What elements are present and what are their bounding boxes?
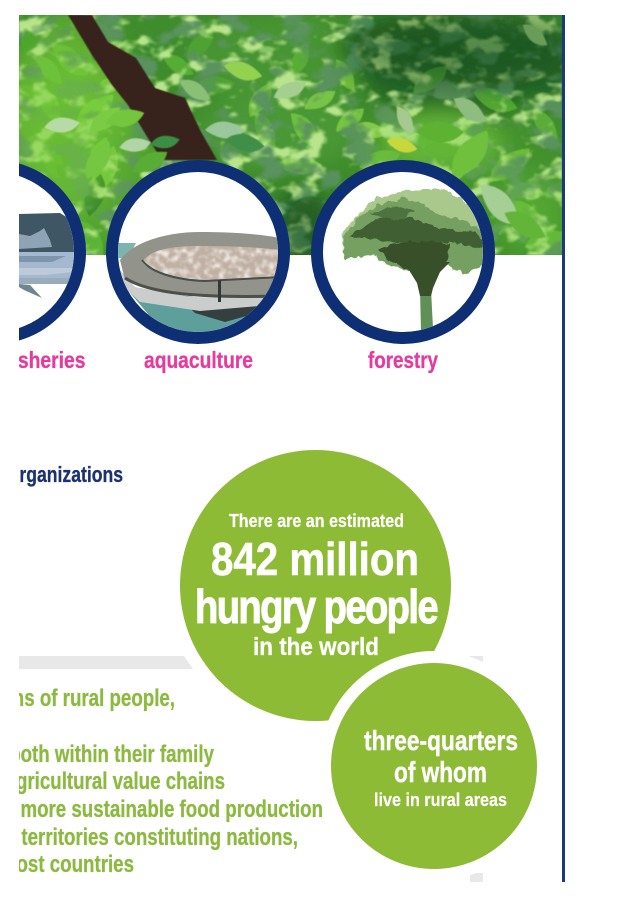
text block: rural people list: both within their family [9, 741, 214, 768]
text block: rural people list: agricultural value chains [6, 768, 225, 795]
label: aquaculture: aquaculture [144, 347, 253, 373]
tree trunk [420, 294, 433, 330]
small print: in the world: in the world [253, 633, 379, 661]
small print: estimated: There are an estimated [229, 511, 404, 531]
headline: three-quarters: three-quarters [364, 725, 518, 756]
gray banner strips [19, 656, 483, 882]
small green circle: three-quarters [319, 651, 549, 881]
text block: rural people list [19, 688, 322, 872]
vertical navy rule [562, 15, 565, 882]
tonal shading over foliage [19, 15, 562, 255]
big green circle: 842 million [180, 450, 451, 721]
tree canopy [341, 190, 492, 274]
small print: rural areas: live in rural areas [374, 790, 507, 810]
label: fisheries: fisheries [6, 349, 86, 373]
text block: rural people list: most countries [0, 851, 134, 878]
icon: fisheries circle [19, 164, 86, 340]
icon: aquaculture circle [112, 166, 284, 338]
photo: soybean field [19, 15, 562, 255]
label: forestry: forestry [368, 347, 438, 373]
headline: hungry people: hungry people [195, 580, 438, 633]
headline: 842 million: 842 million [211, 533, 419, 585]
soil row [68, 15, 217, 160]
label: organizations: organizations [9, 463, 123, 488]
icon: forestry circle [317, 166, 492, 338]
headline: of whom: of whom [394, 757, 487, 789]
text block: rural people list: for more sustainable food production [0, 796, 323, 823]
